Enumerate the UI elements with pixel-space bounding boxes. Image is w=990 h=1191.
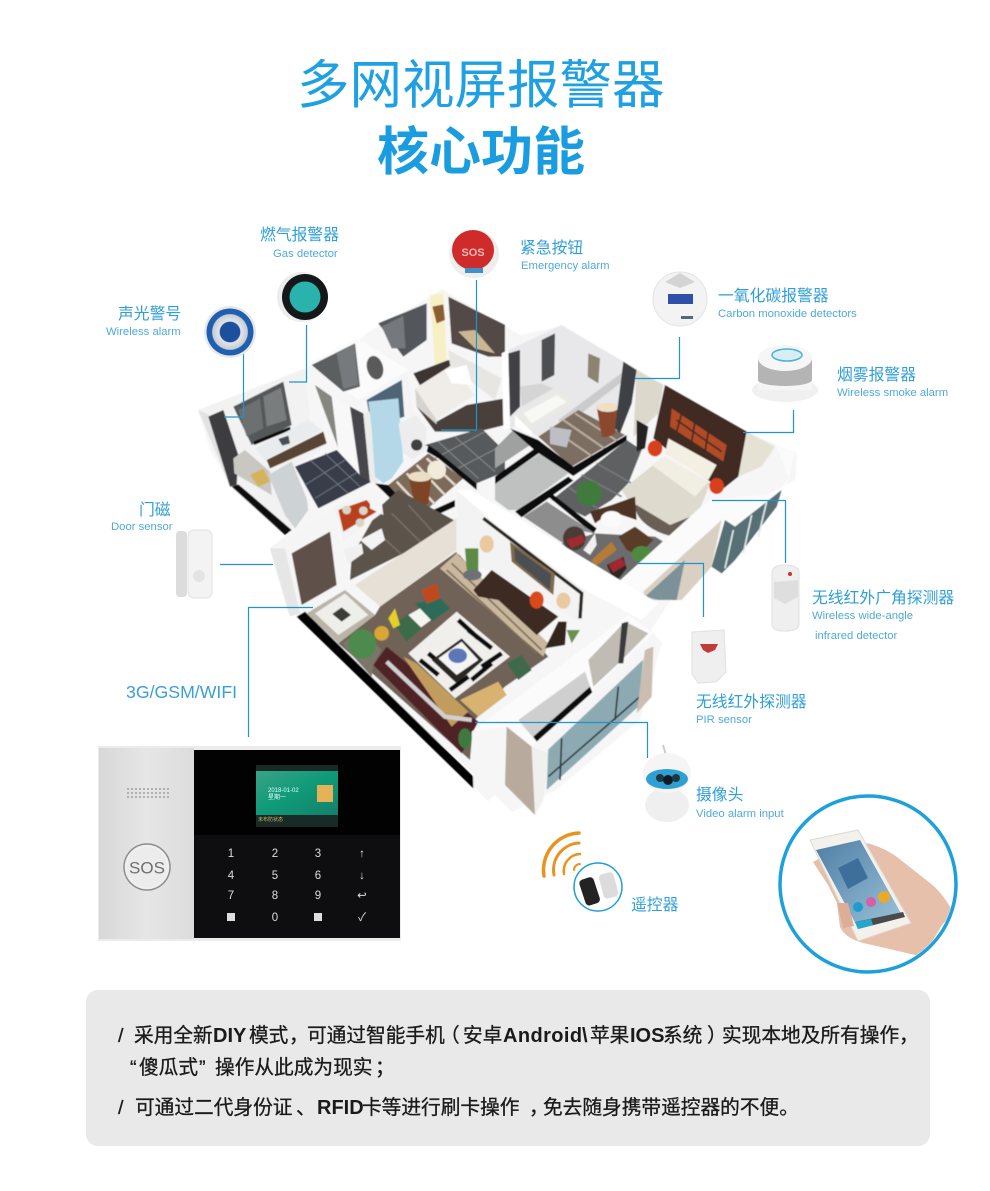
bedroom floor — [552, 440, 642, 517]
label: 一氧化碳报警器: Carbon monoxide detectors — [718, 308, 857, 320]
bullet one: 系统 — [663, 1025, 702, 1047]
icon: gas detector — [277, 272, 328, 322]
colour screen: 2018-01-02 — [268, 788, 299, 794]
bullet two: 卡等进行刷卡操作 — [362, 1097, 520, 1119]
bullet one: \ — [582, 1025, 588, 1047]
label: 无线红外探测器: PIR sensor — [696, 714, 752, 726]
keypad: 2 — [272, 848, 278, 860]
keypad: 4 — [228, 870, 235, 882]
balcony — [472, 615, 653, 747]
bullet one: 苹果 — [590, 1025, 629, 1047]
label: 一氧化碳报警器: 一氧化碳报警器 — [718, 287, 829, 305]
rug — [408, 612, 510, 698]
bullet one: 采用全新 — [134, 1025, 213, 1047]
kitchen walls — [198, 368, 327, 535]
bullet one: / — [118, 1025, 123, 1047]
icon: camera — [643, 745, 691, 822]
icon: remote controls — [574, 863, 622, 911]
keypad: 0 — [272, 912, 278, 924]
bullet one: ， — [899, 1025, 919, 1047]
label: 声光警号: Wireless alarm — [106, 326, 181, 338]
info panel — [86, 990, 930, 1146]
label: 声光警号 — [106, 305, 181, 338]
icon: CO detector — [653, 272, 707, 326]
bullet one: 模式 — [249, 1025, 289, 1047]
label: 一氧化碳报警器 — [718, 287, 857, 320]
bullet two: RFID — [317, 1097, 364, 1119]
label: 紧急按钮 — [520, 239, 610, 272]
black touch area — [194, 750, 400, 938]
SOS button — [124, 844, 170, 890]
entry — [270, 508, 348, 615]
icon: door sensor — [176, 530, 212, 598]
chairs — [415, 598, 450, 622]
keypad: ✓ — [358, 912, 366, 924]
sitting furniture — [590, 497, 637, 523]
bath — [502, 325, 623, 467]
upper bedroom — [363, 290, 448, 372]
bullet one: （ — [440, 1025, 460, 1047]
house base — [198, 289, 797, 812]
bullet one: DIY — [213, 1025, 247, 1047]
keypad: 8 — [272, 890, 278, 902]
label: 燃气报警器: 燃气报警器 — [260, 226, 339, 244]
label: 燃气报警器: Gas detector — [273, 248, 338, 260]
bullet one: 实现本地及所有操作 — [722, 1025, 899, 1047]
label: 无线红外广角探测器: Wireless wide-angle — [812, 610, 913, 622]
rooms: lower wing — [270, 490, 658, 815]
phone in hand — [780, 796, 956, 972]
panel body — [98, 746, 401, 941]
bath column — [308, 338, 408, 400]
icon: SOS button — [449, 230, 499, 278]
label: 紧急按钮: 紧急按钮 — [520, 239, 583, 257]
label: 无线红外广角探测器: infrared detector — [815, 630, 897, 642]
keypad: 7 — [228, 890, 234, 902]
hand — [813, 843, 953, 957]
icon: PIR sensor — [692, 630, 726, 683]
icon: wireless siren — [204, 306, 256, 358]
sofa — [373, 647, 478, 753]
plant — [576, 481, 602, 506]
label: 门磁: Door sensor — [111, 521, 173, 533]
SOS button: SOS — [129, 858, 165, 878]
label: 无线红外广角探测器 — [812, 589, 954, 642]
glass floors — [495, 430, 532, 468]
keypad: ↓ — [359, 870, 365, 882]
outer wall — [615, 443, 795, 600]
bullet one: ， — [289, 1025, 309, 1047]
leader line: CO detector — [635, 337, 680, 378]
bullet one: Android — [503, 1025, 582, 1047]
label: 燃气报警器 — [260, 226, 339, 260]
bullet two: 、 — [296, 1097, 316, 1119]
plant and globe — [348, 629, 376, 659]
bullet one: 操作从此成为现实 — [215, 1057, 372, 1079]
bullet one: 安卓 — [463, 1025, 502, 1047]
leader line: gas detector — [289, 325, 306, 382]
living wall — [457, 490, 658, 620]
label: 无线红外广角探测器: 无线红外广角探测器 — [812, 589, 954, 607]
rooms: right wing — [495, 325, 795, 600]
control panel — [98, 746, 401, 941]
phone — [810, 830, 911, 941]
keypad: 5 — [272, 870, 278, 882]
bullet one: 傻瓜式 — [139, 1057, 198, 1079]
console table — [473, 570, 558, 635]
bullet two: / — [118, 1097, 123, 1119]
icon: wide-angle infrared detector — [772, 565, 799, 631]
keypad: 9 — [315, 890, 321, 902]
keypad: 6 — [315, 870, 321, 882]
keypad: ↑ — [359, 848, 365, 860]
living floor — [338, 552, 548, 760]
dining floor — [350, 490, 457, 580]
bullet two: ， — [529, 1097, 549, 1119]
title: 核心功能 — [377, 124, 585, 182]
label: 遥控器: 遥控器 — [631, 896, 679, 914]
colour screen: 未布防状态 — [258, 816, 283, 823]
label: 门磁: 门磁 — [139, 501, 171, 519]
colour screen: 星期一 — [268, 793, 286, 801]
keypad: ↩ — [357, 890, 367, 902]
leader line: emergency button — [441, 280, 476, 430]
label: 摄像头 — [696, 786, 785, 820]
label: 烟雾报警器: 烟雾报警器 — [837, 366, 916, 384]
keypad: 1 — [228, 848, 234, 860]
bullet one: ； — [375, 1057, 395, 1079]
bullet two: 免去随身携带遥控器的不便。 — [543, 1097, 799, 1119]
bullet one: 可通过智能手机 — [307, 1025, 445, 1047]
icon: wireless signal arcs — [544, 833, 580, 876]
hall floor — [425, 428, 505, 483]
title — [297, 56, 665, 182]
bullet one — [118, 1025, 919, 1079]
label: 3G/GSM/WIFI: 3G/GSM/WIFI — [126, 682, 237, 702]
label: 无线红外探测器 — [696, 693, 807, 726]
bullet two: 可通过二代身份证 — [135, 1097, 292, 1119]
icon: SOS button: SOS — [461, 247, 485, 259]
leader line: wide-angle detector — [712, 500, 786, 563]
dining table — [333, 497, 382, 542]
bullet one: IOS — [630, 1025, 664, 1047]
leader line: PIR sensor — [637, 564, 704, 617]
label: 声光警号: 声光警号 — [118, 305, 181, 323]
label: 紧急按钮: Emergency alarm — [521, 260, 610, 272]
keypad: 3 — [315, 848, 321, 860]
leader line: door sensor — [220, 564, 273, 566]
leader line: control panel — [248, 608, 313, 737]
speaker grille — [127, 789, 170, 797]
icon: smoke alarm — [752, 345, 818, 402]
back wall — [653, 385, 747, 490]
bed — [629, 488, 701, 545]
leader line: siren — [224, 353, 244, 417]
bullet one: ” — [199, 1057, 206, 1079]
label: 烟雾报警器 — [837, 366, 948, 399]
colour screen — [256, 765, 338, 827]
label: 烟雾报警器: Wireless smoke alarm — [837, 387, 948, 399]
label: 门磁 — [111, 501, 173, 533]
title: 多网视屏报警器 — [297, 56, 665, 115]
bullet one: “ — [130, 1057, 137, 1079]
leader line: camera — [475, 722, 648, 758]
rooms: upper left wing — [198, 290, 505, 535]
wood bath floor — [375, 483, 455, 524]
keypad — [227, 848, 367, 924]
floor plan: 3D apartment cutaway — [198, 289, 797, 815]
label: 摄像头: Video alarm input — [696, 808, 785, 820]
label: 无线红外探测器: 无线红外探测器 — [696, 693, 807, 711]
bullet one: ） — [707, 1025, 727, 1047]
leader line: smoke alarm — [743, 410, 794, 432]
label: 摄像头: 摄像头 — [696, 786, 743, 804]
